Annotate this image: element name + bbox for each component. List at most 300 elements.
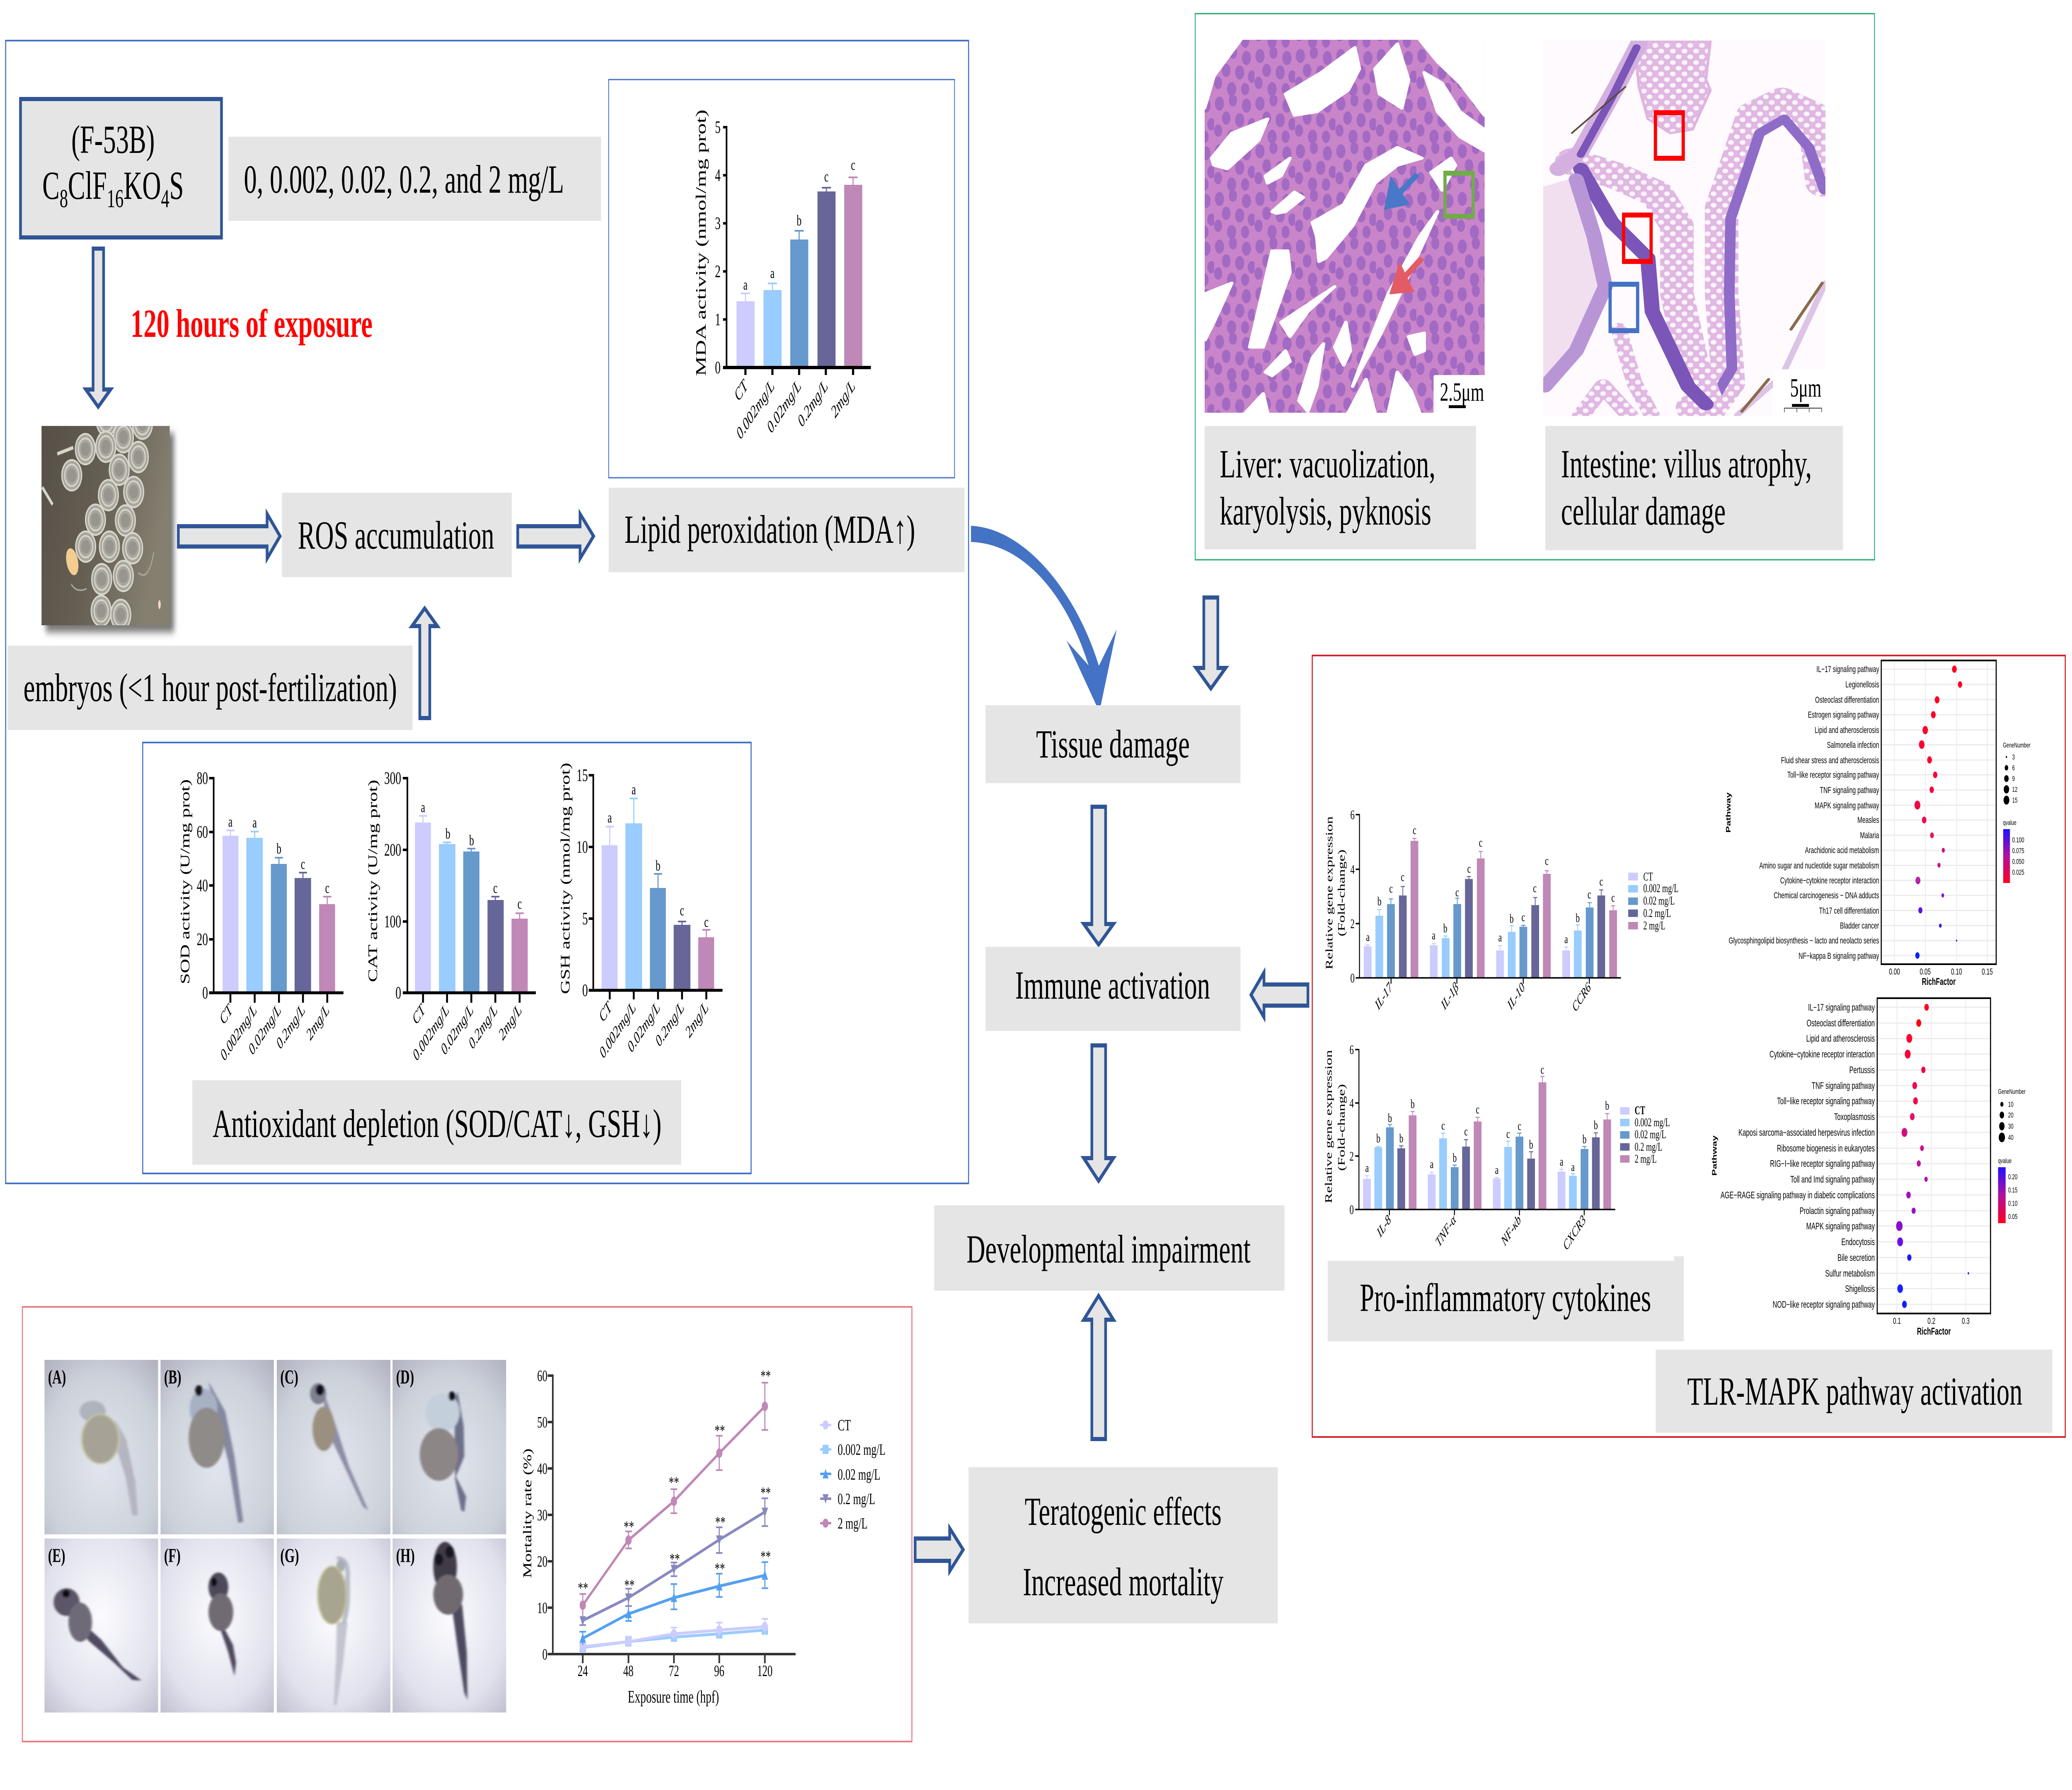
significance letters: chart 2: c: [1441, 1119, 1445, 1132]
pathway labels: dot plot 1: Th17 cell differentiation: [1819, 906, 1879, 916]
y label: chart 2: [1323, 1050, 1347, 1203]
tick labels: mortality: 120: [757, 1662, 772, 1679]
pathway labels: dot plot 1: IL−17 signaling pathway: [1816, 664, 1879, 674]
significance letters: chart 2: c: [1541, 1063, 1544, 1076]
gene labels: chart 2: [1375, 1212, 1588, 1253]
colour legend: dot plot 1: 0.025: [2012, 868, 2024, 877]
F-53B chemical box: 8: [60, 184, 68, 213]
micrograph B: [160, 1360, 274, 1534]
pathway labels: dot plot 1: Chemical carcinogenesis − DNA adducts: [1774, 890, 1879, 900]
tick labels: MDA: [715, 117, 721, 377]
arrow: histology to tissue damage: [1196, 597, 1226, 689]
micrograph F: (F): [164, 1544, 181, 1567]
tick labels: MDA: 0: [715, 358, 721, 377]
pathway labels: dot plot 1: Fluid shear stress and atherosclerosis: [1781, 755, 1879, 765]
significance letters: MDA: c: [824, 168, 828, 185]
legend: mortality: 0.002 mg/L: [838, 1441, 886, 1458]
arrow: teratogenic effects to developmental impairment: [1084, 1296, 1113, 1439]
F-53B chemical box: ClF: [68, 164, 107, 208]
gene labels: chart 2: TNF-α: [1433, 1212, 1458, 1250]
chart: CAT activity: CAT activity (U/mg prot): [366, 780, 380, 982]
tick labels: MDA: 1: [715, 310, 721, 329]
micrograph: liver: [1205, 40, 1486, 414]
grid: dot plot 2: [1877, 998, 1990, 1313]
chart: GSH activity: 5: [582, 909, 588, 928]
legend: chart 1: 2 mg/L: [1643, 919, 1665, 932]
significance letters: MDA: b: [797, 212, 801, 229]
significance stars: mortality: **: [760, 1548, 771, 1565]
size legend: dot plot 2: 40: [2008, 1134, 2014, 1142]
x ticks: dot plot 2: 0.3: [1962, 1316, 1970, 1326]
pathway labels: dot plot 2: IL−17 signaling pathway: [1808, 1002, 1875, 1013]
colour legend: dot plot 1: [2003, 819, 2024, 883]
pathway labels: dot plot 1: MAPK signaling pathway: [1815, 801, 1879, 810]
series: 0.002 mg/L: [580, 1626, 768, 1652]
significance letters: MDA: a: [743, 276, 748, 293]
x ticks: dot plot 1: 0.05: [1920, 967, 1931, 977]
y label: chart 2: (Fold-change): [1336, 1084, 1347, 1171]
chart: SOD activity: CT: [217, 1000, 235, 1028]
x ticks: dot plot 2: [1893, 1316, 1970, 1326]
tissue damage box: [985, 705, 1240, 783]
chart: CAT activity: 200: [384, 840, 401, 859]
arrow: mortality to teratogenic effects: [915, 1528, 963, 1571]
chart: KEGG dot plot 1: [1725, 660, 2031, 987]
arrow: tissue damage to immune activation: [1084, 807, 1113, 945]
dots: dot plot 2: [1896, 1004, 1969, 1308]
significance letters: chart 1: b: [1443, 922, 1447, 935]
significance letters: chart 2: [1365, 1063, 1609, 1177]
chart: SOD activity: 0.2mg/L: [274, 1001, 307, 1052]
chart: GSH activity: a: [608, 809, 612, 826]
chart: CAT activity: c: [518, 895, 522, 912]
micrograph G: [277, 1538, 390, 1713]
chart: SOD activity: 2mg/L: [304, 1001, 332, 1044]
pathway labels: dot plot 1: Legionellosis: [1845, 680, 1879, 689]
micrograph G: (G): [280, 1544, 299, 1567]
colour legend: dot plot 1: 0.050: [2012, 858, 2024, 866]
chart: SOD activity: c: [325, 880, 329, 896]
tick labels: mortality: 40: [537, 1460, 547, 1477]
chart: SOD activity: b: [276, 840, 281, 857]
x ticks: dot plot 1: 0.10: [1951, 967, 1962, 977]
pathway labels: dot plot 2: Kaposi sarcoma−associated herpesvirus infection: [1738, 1127, 1875, 1138]
y label: chart 2: Relative gene expression: [1323, 1050, 1334, 1203]
concentration box: [228, 137, 601, 221]
micrograph F: [160, 1538, 274, 1713]
micrograph E: [44, 1538, 158, 1713]
chart: CAT activity: a: [421, 799, 425, 815]
pathway labels: dot plot 2: Lipid and atherosclerosis: [1806, 1033, 1875, 1044]
significance letters: chart 1: b: [1377, 895, 1382, 908]
significance letters: chart 2: b: [1399, 1132, 1403, 1145]
legend: chart 2: 2 mg/L: [1635, 1153, 1657, 1166]
micrograph C: [277, 1360, 390, 1534]
tick labels: mortality: 10: [537, 1599, 547, 1616]
tick labels: MDA: 3: [715, 213, 721, 233]
arrow: embryos to ROS: [178, 514, 280, 559]
F-53B chemical box: S: [169, 164, 184, 208]
size legend: dot plot 2: 20: [2008, 1111, 2014, 1120]
legend: chart 2: 0.02 mg/L: [1635, 1128, 1666, 1141]
frame: dot plot 1: [1881, 660, 1996, 964]
chart: GSH activity: 0.2mg/L: [653, 999, 687, 1050]
chart: CAT activity: 0: [395, 983, 401, 1002]
x labels: MDA: CT: [731, 375, 751, 405]
pathway labels: dot plot 2: RIG−I−like receptor signaling pathway: [1770, 1159, 1875, 1169]
micrograph D: (D): [396, 1366, 414, 1388]
chart: CAT activity: 2mg/L: [496, 1001, 524, 1044]
significance letters: chart 1: c: [1479, 836, 1482, 849]
F-53B chemical box: KO: [123, 164, 161, 208]
panel: MDA chart: [609, 80, 954, 478]
micrograph C: (C): [280, 1366, 298, 1388]
significance letters: chart 1: c: [1521, 910, 1525, 924]
significance letters: chart 2: a: [1430, 1157, 1433, 1171]
arrow: F-53B to embryos: [86, 249, 111, 407]
panel: antioxidant enzymes: [143, 743, 751, 1173]
significance letters: chart 1: a: [1564, 932, 1568, 946]
tick labels: mortality: 72: [669, 1662, 679, 1679]
significance letters: chart 1: c: [1533, 881, 1537, 895]
chart: CAT activity: 100: [384, 912, 401, 931]
significance stars: mortality: **: [760, 1484, 771, 1501]
y title: dot plot 1: Pathway: [1725, 792, 1732, 833]
arrow: antioxidant to ROS: [412, 608, 437, 718]
significance letters: chart 2: b: [1605, 1099, 1609, 1113]
green box: pyknosis: [1445, 173, 1473, 216]
series: 2 mg/L: [579, 1383, 768, 1616]
chart: CAT activity: CT: [410, 1000, 428, 1028]
series: 0.2 mg/L: [579, 1498, 768, 1626]
tick labels: mortality: 50: [537, 1413, 547, 1431]
intestine findings box: Intestine: villus atrophy,: [1561, 442, 1812, 486]
gene labels: chart 1: IL-1β: [1439, 979, 1461, 1013]
tick labels: chart 1: 6: [1350, 808, 1355, 822]
chart: gene expression IL-8 TNF-a NF-kb CXCR3: [1323, 1043, 1670, 1253]
pathway labels: dot plot 2: AGE−RAGE signaling pathway in diabetic complications: [1721, 1190, 1875, 1201]
arrow: cytokines to immune activation: [1251, 972, 1308, 1017]
colour legend: dot plot 1: 0.100: [2012, 836, 2024, 844]
axis titles: mortality: Mortality rate (%): [521, 1449, 534, 1578]
chart: SOD activity: 60: [197, 822, 208, 842]
chart: SOD activity: 40: [197, 876, 208, 895]
legend: chart 2: 0.2 mg/L: [1635, 1141, 1662, 1154]
liver findings box: karyolysis, pyknosis: [1220, 489, 1431, 533]
pathway labels: dot plot 1: [1729, 664, 1879, 961]
legend: mortality: 0.2 mg/L: [838, 1490, 875, 1507]
size legend: dot plot 1: 3: [2012, 753, 2015, 762]
axis titles: mortality: [521, 1449, 719, 1706]
significance letters: chart 2: b: [1583, 1132, 1586, 1146]
x labels: MDA: 0.2mg/L: [795, 376, 830, 431]
bars: chart 2: [1363, 1076, 1611, 1209]
arrow: curved blue to tissue damage: [971, 526, 1117, 712]
pathway labels: dot plot 2: [1721, 1002, 1875, 1310]
liver findings box: Liver: vacuolization,: [1220, 442, 1435, 486]
pathway labels: dot plot 1: Estrogen signaling pathway: [1808, 710, 1879, 720]
tick labels: mortality: 24: [578, 1662, 588, 1679]
F-53B chemical box: (F-53B): [71, 118, 155, 162]
significance stars: mortality: **: [715, 1422, 725, 1439]
significance letters: chart 2: a: [1495, 1163, 1498, 1177]
tick labels: chart 2: 2: [1350, 1149, 1354, 1164]
chart: SOD activity: a: [228, 813, 233, 830]
tick labels: chart 1: 0: [1350, 971, 1355, 985]
intestine findings box: cellular damage: [1561, 489, 1726, 533]
gene labels: chart 2: IL-8: [1375, 1212, 1393, 1241]
micrograph: intestine: [1543, 41, 1825, 416]
pathway labels: dot plot 2: Shigellosis: [1845, 1284, 1875, 1294]
chart: CAT activity: b: [445, 825, 450, 842]
F-53B chemical box: [20, 99, 222, 237]
liver findings box: [1205, 426, 1476, 549]
pathway labels: dot plot 2: TNF signaling pathway: [1812, 1081, 1875, 1091]
chart: GSH activity: a: [632, 781, 636, 798]
pathway labels: dot plot 2: Osteoclast differentiation: [1807, 1018, 1875, 1029]
significance letters: chart 1: c: [1545, 854, 1549, 868]
frame: dot plot 2: [1877, 998, 1990, 1313]
pathway labels: dot plot 1: Osteoclast differentiation: [1815, 695, 1879, 705]
pathway labels: dot plot 1: NF−kappa B signaling pathway: [1798, 951, 1879, 961]
teratogenic effects box: Increased mortality: [1023, 1560, 1224, 1604]
size legend: dot plot 1: GeneNumber: [2003, 742, 2031, 750]
axes: chart 1: [1356, 814, 1621, 984]
pathway labels: dot plot 1: Bladder cancer: [1840, 921, 1879, 931]
tick labels: chart 2: [1350, 1043, 1354, 1217]
tick labels: MDA: 5: [715, 117, 721, 137]
chart: GSH activity: 0: [582, 980, 588, 1000]
y axis label: MDA: MDA activity (nmol/mg prot): [692, 109, 709, 376]
legend: chart 2: 0.002 mg/L: [1635, 1116, 1670, 1129]
size legend: dot plot 2: [1998, 1088, 2026, 1142]
chart: GSH activity: [558, 763, 722, 1062]
significance letters: chart 1: c: [1455, 885, 1459, 899]
scale bar: 5 micrometres: 5μm: [1790, 373, 1821, 402]
significance stars: mortality: [578, 1367, 771, 1596]
x labels: MDA: 2mg/L: [828, 376, 857, 421]
legend: mortality: 0.02 mg/L: [838, 1466, 881, 1483]
developmental impairment box: Developmental impairment: [966, 1227, 1251, 1271]
photo: zebrafish embryos: [41, 405, 174, 632]
y label: chart 1: Relative gene expression: [1324, 816, 1335, 970]
immune activation box: [985, 947, 1240, 1031]
series: 0.02 mg/L: [579, 1562, 768, 1645]
significance stars: mortality: **: [715, 1513, 726, 1531]
size legend: dot plot 1: 12: [2012, 786, 2018, 794]
pathway labels: dot plot 1: TNF signaling pathway: [1820, 785, 1879, 795]
significance stars: mortality: **: [578, 1579, 588, 1596]
ROS accumulation box: ROS accumulation: [298, 513, 494, 557]
micrograph H: (H): [396, 1544, 415, 1567]
pro-inflammatory cytokines box: Pro-inflammatory cytokines: [1360, 1276, 1651, 1320]
chart: KEGG dot plot 2: [1711, 998, 2026, 1337]
significance letters: chart 2: b: [1453, 1151, 1457, 1165]
chart: SOD activity: 0.002mg/L: [218, 1001, 259, 1064]
significance letters: chart 1: c: [1467, 862, 1471, 876]
bars: MDA: [736, 177, 862, 368]
significance letters: MDA: c: [851, 157, 855, 173]
x labels: MDA: [731, 375, 857, 443]
intestine findings box: [1545, 426, 1843, 550]
x ticks: dot plot 2: 0.2: [1927, 1316, 1935, 1326]
pathway labels: dot plot 1: Salmonella infection: [1827, 740, 1879, 750]
colour legend: dot plot 2: 0.20: [2008, 1173, 2017, 1181]
pathway labels: dot plot 2: Prolactin signaling pathway: [1800, 1206, 1875, 1217]
micrograph B: (B): [164, 1366, 181, 1388]
panel: mortality and teratogenicity: [22, 1307, 912, 1742]
pro-inflammatory cytokines box: [1328, 1256, 1684, 1341]
tick labels: chart 2: 0: [1350, 1202, 1354, 1217]
tick labels: mortality: 96: [714, 1662, 724, 1679]
gene labels: chart 2: NF-κb: [1499, 1212, 1523, 1249]
x ticks: dot plot 1: 0.00: [1889, 967, 1900, 977]
chart: SOD activity: 0: [202, 983, 208, 1002]
x ticks: dot plot 2: 0.1: [1893, 1316, 1901, 1326]
colour legend: dot plot 2: 0.10: [2008, 1200, 2017, 1208]
teratogenic effects box: Teratogenic effects: [1025, 1490, 1222, 1534]
legend: mortality: [820, 1416, 886, 1532]
TLR-MAPK pathway activation box: TLR-MAPK pathway activation: [1687, 1369, 2022, 1413]
tick labels: chart 2: 4: [1350, 1096, 1354, 1110]
chart: gene expression IL-17 IL-1b IL-10 CCR6: [1324, 808, 1679, 1015]
micrograph E: (E): [48, 1544, 65, 1567]
micrograph D: [392, 1360, 506, 1534]
chart: GSH activity: GSH activity (nmol/mg prot): [558, 763, 572, 994]
axes: chart 2: [1355, 1049, 1615, 1215]
TLR-MAPK pathway activation box: [1656, 1350, 2052, 1433]
pathway labels: dot plot 2: Toll and Imd signaling pathway: [1790, 1174, 1875, 1185]
pathway labels: dot plot 2: NOD−like receptor signaling pathway: [1773, 1299, 1875, 1310]
significance letters: chart 2: b: [1529, 1138, 1533, 1151]
significance letters: chart 1: c: [1389, 882, 1393, 895]
chart: CAT activity: 0.002mg/L: [410, 1001, 452, 1064]
pathway labels: dot plot 2: Endocytosis: [1841, 1237, 1875, 1248]
significance letters: MDA: [743, 157, 855, 293]
size legend: dot plot 2: 10: [2008, 1101, 2014, 1109]
chart: SOD activity: SOD activity (U/mg prot): [178, 779, 192, 984]
significance letters: chart 1: c: [1413, 823, 1416, 837]
gene labels: chart 1: [1372, 979, 1593, 1015]
colour legend: dot plot 1: 0.075: [2012, 847, 2024, 855]
micrograph A: [44, 1360, 158, 1534]
chart: CAT activity: [366, 768, 536, 1064]
y label: chart 1: (Fold-change): [1336, 849, 1347, 936]
significance letters: chart 2: b: [1594, 1118, 1598, 1132]
F-53B chemical box: 4: [161, 184, 169, 213]
blue arrow: vacuolization: [1384, 174, 1417, 210]
legend: chart 2: [1620, 1104, 1670, 1166]
tissue damage box: Tissue damage: [1036, 722, 1190, 766]
pathway labels: dot plot 1: Malaria: [1860, 830, 1879, 840]
embryos box: [7, 646, 412, 730]
pathway labels: dot plot 2: Pertussis: [1849, 1065, 1875, 1076]
chart: SOD activity: 80: [197, 768, 208, 788]
red arrow: karyolysis: [1389, 258, 1422, 295]
antioxidant depletion box: [192, 1080, 681, 1165]
gene labels: chart 2: CXCR3: [1561, 1212, 1588, 1253]
pathway labels: dot plot 1: Measles: [1857, 815, 1879, 825]
chart: GSH activity: 2mg/L: [683, 999, 711, 1041]
panel: immune response: [1312, 656, 2065, 1437]
red box: villus damage upper: [1656, 113, 1683, 158]
pathway labels: dot plot 2: Sulfur metabolism: [1825, 1268, 1875, 1279]
significance letters: chart 1: c: [1588, 888, 1591, 901]
micrograph A: (A): [48, 1366, 66, 1388]
significance letters: chart 2: b: [1411, 1097, 1415, 1111]
x title: dot plot 1: RichFactor: [1922, 977, 1956, 987]
significance letters: chart 1: [1366, 823, 1615, 946]
pathway labels: dot plot 2: Toll−like receptor signaling pathway: [1777, 1096, 1875, 1107]
chart: GSH activity: c: [680, 902, 684, 919]
chart: GSH activity: b: [656, 857, 661, 874]
chart: GSH activity: 0.002mg/L: [597, 999, 638, 1062]
pathway labels: dot plot 1: Amino sugar and nucleotide sugar metabolism: [1759, 861, 1879, 871]
pathway labels: dot plot 1: Toll−like receptor signaling pathway: [1787, 770, 1879, 780]
tick labels: chart 1: 2: [1350, 917, 1355, 931]
significance letters: chart 1: b: [1576, 911, 1580, 925]
legend: mortality: 2 mg/L: [838, 1514, 868, 1532]
tick labels: mortality: 30: [537, 1506, 547, 1524]
F-53B chemical box: C: [42, 164, 60, 208]
chart: SOD activity: 0.02mg/L: [246, 1001, 283, 1058]
size legend: dot plot 2: GeneNumber: [1998, 1088, 2026, 1096]
scale bar: 2.5 micrometres: 2.5μm: [1440, 377, 1484, 406]
lipid peroxidation box: Lipid peroxidation (MDA↑): [625, 508, 915, 552]
significance letters: chart 2: c: [1506, 1127, 1510, 1141]
grid: dot plot 1: [1881, 660, 1996, 964]
panel: histology: [1195, 14, 1874, 560]
significance letters: chart 1: a: [1366, 930, 1370, 944]
significance stars: mortality: **: [624, 1518, 634, 1535]
colour legend: dot plot 2: [1998, 1157, 2017, 1223]
F-53B chemical box: 16: [107, 184, 123, 213]
teratogenic effects box: [968, 1467, 1278, 1623]
tick labels: mortality: 48: [623, 1662, 634, 1679]
chart: GSH activity: 0.02mg/L: [625, 999, 663, 1056]
panel: oxidative stress pathway: [6, 41, 968, 1183]
x labels: MDA: 0.02mg/L: [764, 376, 804, 437]
red box: villus damage middle: [1624, 215, 1651, 261]
x ticks: dot plot 1: 0.15: [1982, 967, 1993, 977]
significance letters: chart 2: b: [1388, 1111, 1392, 1125]
size legend: dot plot 1: 9: [2012, 775, 2015, 783]
tick labels: chart 1: 4: [1350, 862, 1355, 877]
axes: MDA: [723, 126, 726, 368]
legend: chart 1: 0.002 mg/L: [1643, 882, 1679, 895]
arrow: immune activation to developmental impairment: [1084, 1045, 1113, 1181]
tick labels: mortality: 60: [537, 1367, 547, 1384]
pathway labels: dot plot 2: Toxoplasmosis: [1834, 1112, 1875, 1122]
significance stars: mortality: **: [715, 1560, 725, 1577]
immune activation box: Immune activation: [1015, 963, 1210, 1007]
pathway labels: dot plot 2: Bile secretion: [1837, 1253, 1875, 1263]
dots: dot plot 1: [1915, 665, 1962, 959]
gene labels: chart 1: IL-17: [1372, 979, 1395, 1013]
concentration box: 0, 0.002, 0.02, 0.2, and 2 mg/L: [244, 157, 564, 201]
chart: SOD activity: [178, 768, 344, 1064]
significance stars: mortality: **: [625, 1576, 634, 1594]
legend: chart 1: CT: [1643, 871, 1653, 883]
significance letters: chart 2: a: [1571, 1160, 1575, 1174]
size legend: dot plot 1: 15: [2012, 796, 2018, 805]
pathway labels: dot plot 2: Cytokine−cytokine receptor interaction: [1769, 1049, 1875, 1060]
gene labels: chart 1: IL-10: [1505, 980, 1527, 1013]
tick labels: mortality: 20: [537, 1553, 547, 1570]
chart: GSH activity: 10: [576, 837, 588, 856]
tick labels: MDA: 4: [715, 165, 721, 185]
pathway labels: dot plot 1: Cytokine−cytokine receptor interaction: [1780, 876, 1879, 885]
